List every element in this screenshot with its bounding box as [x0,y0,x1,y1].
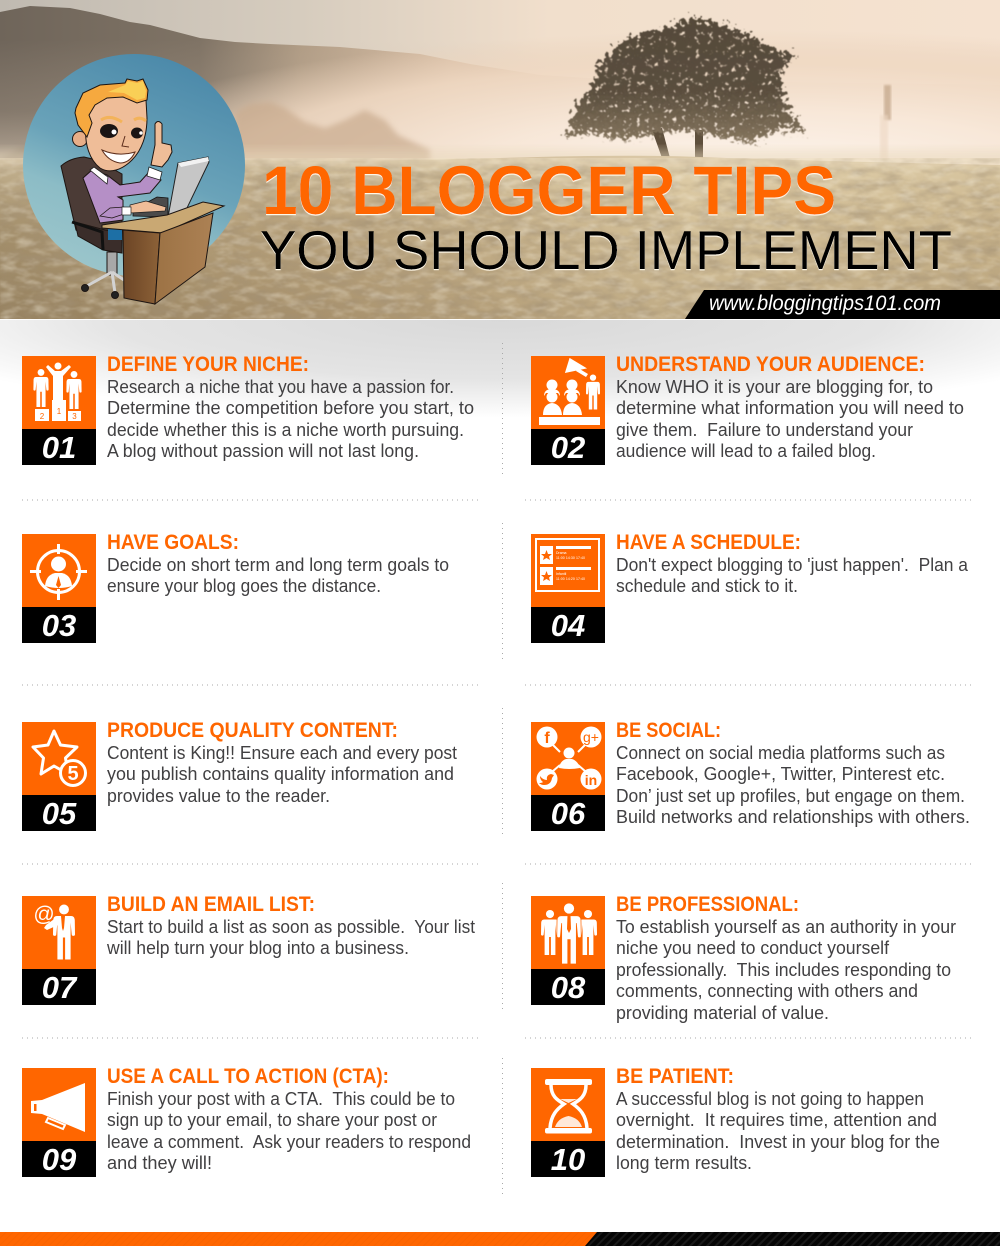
tip 04 [531,531,969,643]
body text: audience will lead to a failed blog. [616,441,876,461]
avatar: blogger character at desk in blue circle [23,54,245,304]
body text: Determine the competition before you start, to [107,398,474,418]
tip 08 [531,893,956,1023]
icon: target on person [22,534,96,607]
number badge: 03 [42,608,76,643]
body text: schedule and stick to it. [616,576,798,596]
raised hand and finger [151,122,172,167]
heading: UNDERSTAND YOUR AUDIENCE: [616,353,925,376]
lone tree [565,17,807,158]
heading: HAVE A SCHEDULE: [616,531,801,554]
body text: ensure your blog goes the distance. [107,576,381,596]
body text: Facebook, Google+, Twitter, Pinterest etc. [616,764,945,784]
website url banner: www.bloggingtips101.com [709,292,941,315]
icon: man with email sign [22,896,96,969]
body text: Build networks and relationships with others. [616,807,970,827]
icon: podium winners [22,356,96,429]
body text: sign up to your email, to share your post or [107,1110,437,1130]
body text: comments, connecting with others and [616,981,918,1001]
icon: schedule board: 11:00 14:20 17:40 [556,577,585,581]
website url banner [685,290,1000,319]
body text: Content is King!! Ensure each and every post [107,743,457,763]
shirt and arm [83,170,161,223]
number badge: 06 [551,796,586,831]
heading: BUILD AN EMAIL LIST: [107,893,315,916]
heading: HAVE GOALS: [107,531,239,554]
icon: schedule board: Infantil [556,572,567,576]
body text [616,377,964,461]
number badge [22,795,96,831]
body text [616,555,969,596]
body text: Connect on social media platforms such as [616,743,945,763]
body text: give them. Failure to understand your [616,420,913,440]
body text: determination. Invest in your blog for the [616,1132,940,1152]
icon: schedule board [531,534,605,607]
number badge: 07 [42,970,78,1005]
body text: A blog without passion will not last long. [107,441,419,461]
body text: A successful blog is not going to happen [616,1089,924,1109]
body text: Finish your post with a CTA. This could be to [107,1089,455,1109]
tip 07 [22,893,475,1005]
icon: star rating: 5 [67,763,79,785]
body text [107,377,474,461]
icon: hourglass [531,1068,605,1141]
icon: social network [531,722,605,795]
icon: star rating [22,722,96,795]
icon: podium winners: 3 [72,412,77,421]
icon: podium winners: 2 [40,412,45,421]
body text: Know WHO it is your are blogging for, to [616,377,933,397]
number badge: 05 [42,796,77,831]
number badge [531,429,605,465]
body text: and they will! [107,1153,212,1173]
body text: decide whether this is a niche worth pursuing. [107,420,464,440]
body text: determine what information you will need to [616,398,964,418]
icon: schedule board: Drama [556,551,567,555]
body text: provides value to the reader. [107,786,330,806]
desk [102,202,224,233]
number badge: 09 [42,1142,77,1177]
icon: three professionals [531,896,605,969]
body text: will help turn your blog into a business. [106,938,409,958]
tip 02 [531,353,964,465]
chair [61,157,124,298]
body text [616,1089,940,1173]
body text: Start to build a list as soon as possible. Your list [107,917,475,937]
tip 10 [531,1065,940,1177]
title line 2: YOU SHOULD IMPLEMENT [260,219,952,281]
body text: professionally. This includes responding to [616,960,951,980]
body text: Don’ just set up profiles, but engage on them. [616,786,965,806]
section background glow [0,320,1000,420]
icon: schedule board: 11:00 14:30 17:40 [556,556,585,560]
number badge: 10 [551,1142,585,1177]
heading: BE PROFESSIONAL: [616,893,799,916]
tip 06 [531,719,970,831]
body text [107,1089,471,1173]
heading: BE PATIENT: [616,1065,734,1088]
icon: podium winners: 1 [57,407,62,416]
heading: DEFINE YOUR NICHE: [107,353,309,376]
body text: providing material of value. [616,1003,829,1023]
number badge [22,969,96,1005]
body text [106,917,475,958]
body text: Decide on short term and long term goals to [107,555,449,575]
body text: To establish yourself as an authority in your [616,917,956,937]
body text: Don't expect blogging to 'just happen'. Plan a [616,555,969,575]
heading: PRODUCE QUALITY CONTENT: [107,719,398,742]
number badge: 08 [551,970,586,1005]
body text: you publish contains quality information and [107,764,454,784]
icon: man with email sign: @ [33,903,55,926]
icon: social network: g+ [583,729,599,745]
icon: audience and speaker [531,356,605,429]
tip 05 [22,719,457,831]
title line 1: 10 BLOGGER TIPS [262,152,836,229]
body text [616,743,970,827]
body text [107,555,449,596]
body text: Research a niche that you have a passion for. [107,377,454,397]
body text [107,743,457,806]
body text: niche you need to conduct yourself [616,938,890,958]
number badge [531,1141,605,1177]
number badge [22,1141,96,1177]
icon: social network: f [544,730,550,747]
number badge: 01 [42,430,76,465]
tip 09 [22,1065,471,1177]
head [72,132,88,146]
number badge [531,795,605,831]
tip 01 [22,353,474,465]
heading: USE A CALL TO ACTION (CTA): [107,1065,389,1088]
laptop [133,197,168,217]
footer stripe [0,1232,1000,1246]
body text [616,917,956,1023]
number badge [531,607,605,643]
icon: megaphone [22,1068,96,1141]
number badge [22,607,96,643]
body text: leave a comment. Ask your readers to respond [107,1132,471,1152]
header photo: misty field landscape [0,0,1000,319]
tip 03 [22,531,449,643]
number badge [22,429,96,465]
body text: overnight. It requires time, attention and [616,1110,937,1130]
heading: BE SOCIAL: [616,719,721,742]
number badge [531,969,605,1005]
body text: long term results. [616,1153,752,1173]
icon: social network: in [585,772,597,788]
number badge: 04 [551,608,585,643]
number badge: 02 [551,430,585,465]
